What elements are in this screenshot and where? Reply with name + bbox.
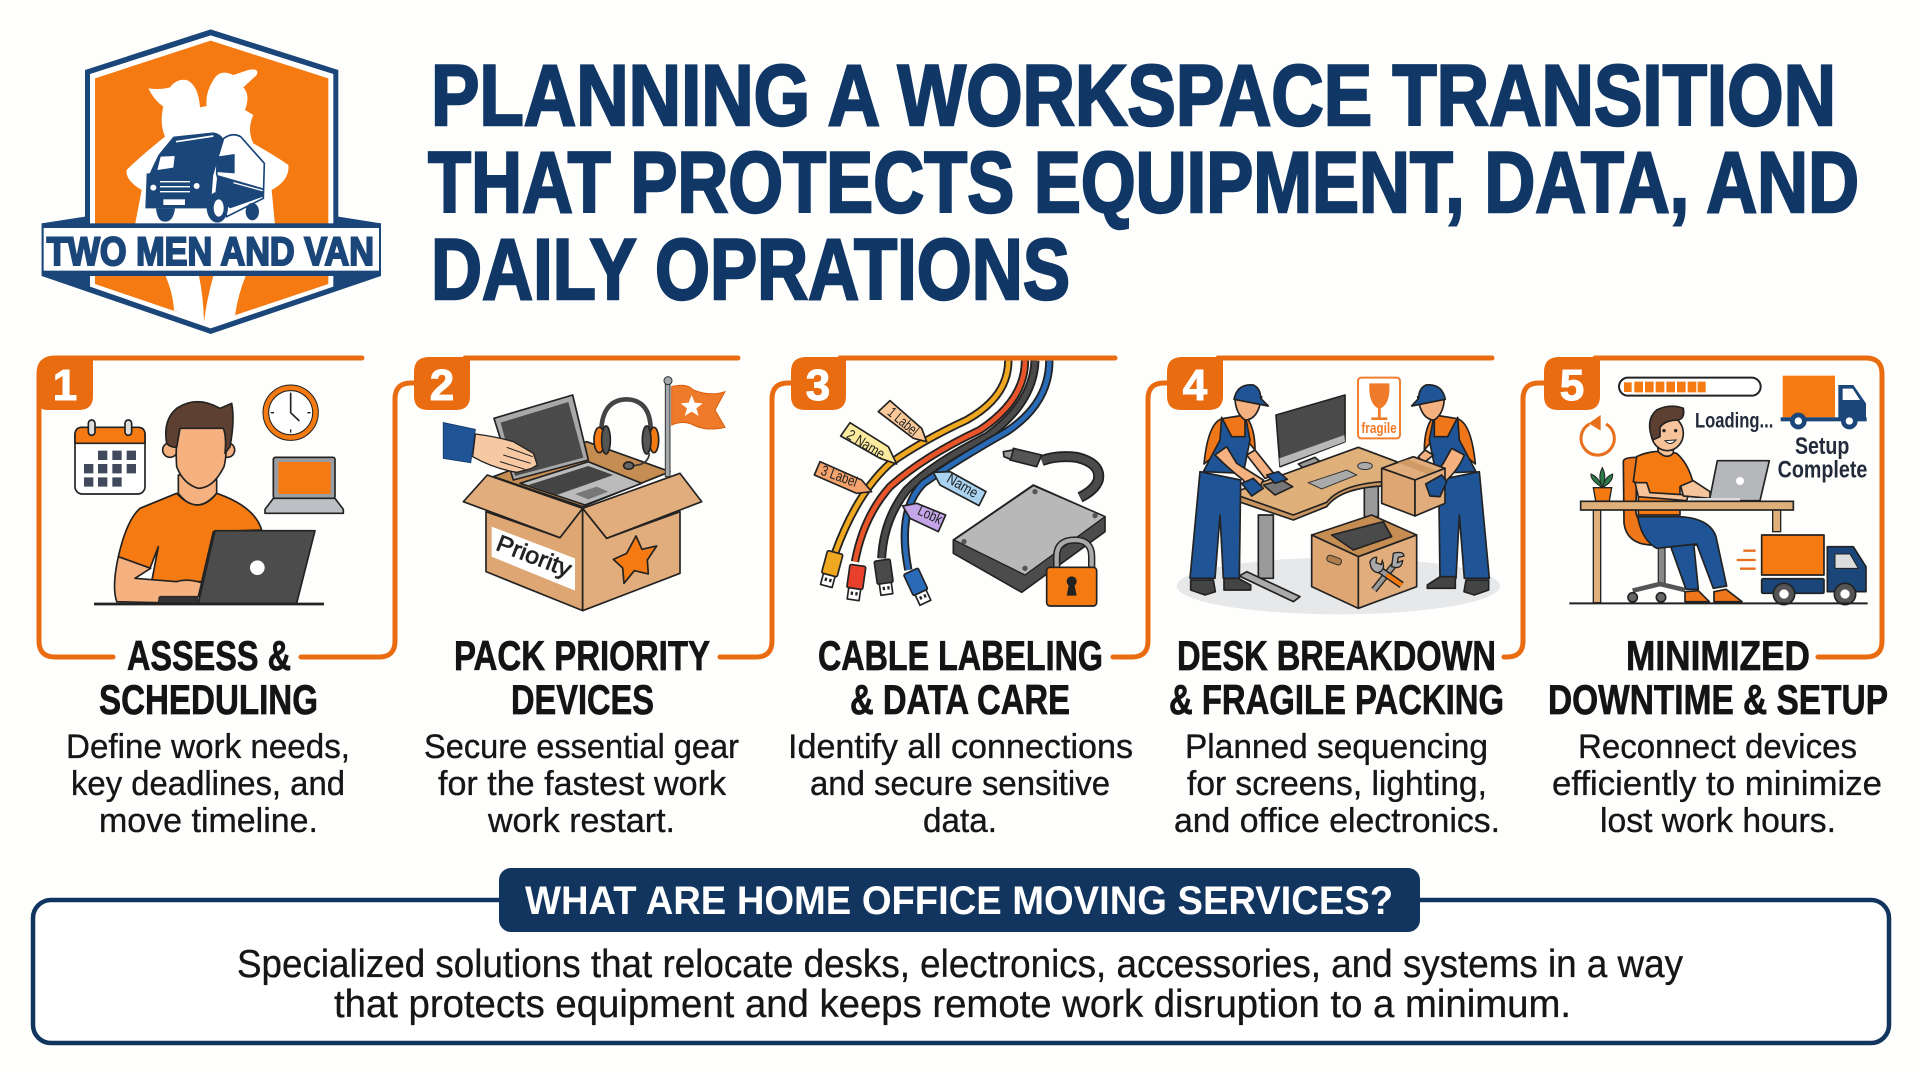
icon: hand bbox=[443, 423, 537, 472]
step 4 text: for screens, lighting, bbox=[1187, 765, 1487, 803]
icon: cardboard box: Priority bbox=[493, 530, 576, 582]
cable tags: 3 Label bbox=[819, 463, 859, 491]
laptop bbox=[1690, 461, 1769, 501]
desk bbox=[1232, 447, 1397, 520]
badge: step 2: 2 bbox=[430, 361, 454, 410]
step 4 text: & FRAGILE PACKING bbox=[1169, 676, 1504, 723]
icon: monitor bbox=[1276, 395, 1345, 475]
panel body text: that protects equipment and keeps remote work disruption to a minimum. bbox=[334, 983, 1571, 1026]
step 5 text: Reconnect devices bbox=[1578, 728, 1857, 766]
icon: packed box with tools bbox=[1312, 515, 1417, 608]
right mover bbox=[1412, 385, 1489, 595]
status labels: Setup bbox=[1795, 433, 1849, 460]
badge: step 3: 3 bbox=[806, 361, 830, 410]
illustration 4: two movers and desk breakdown bbox=[1177, 378, 1500, 614]
panel heading pill bbox=[499, 868, 1420, 932]
step 2 text: Secure essential gear bbox=[424, 728, 739, 766]
panel: what are home office moving services bbox=[33, 868, 1889, 1043]
title: DAILY OPRATIONS bbox=[431, 222, 1070, 318]
icon: headset bbox=[594, 399, 659, 469]
icon: refresh arrow bbox=[1581, 415, 1614, 455]
illustration 1: person planning at laptop bbox=[75, 385, 343, 604]
step 3 text: and secure sensitive bbox=[810, 765, 1110, 803]
badge: step 5 bbox=[1544, 357, 1600, 410]
step 4 text: DESK BREAKDOWN bbox=[1177, 632, 1496, 679]
step 5 text: lost work hours. bbox=[1600, 802, 1836, 840]
badge: step 1 bbox=[37, 357, 93, 410]
status labels: Loading... bbox=[1695, 408, 1773, 432]
step 3 text: Identify all connections bbox=[788, 728, 1133, 766]
step 3 text: CABLE LABELING bbox=[818, 632, 1103, 679]
step 3 text bbox=[788, 632, 1133, 840]
icon: padlock bbox=[1047, 540, 1097, 606]
chair bbox=[1623, 457, 1698, 602]
icon: external drive bbox=[953, 448, 1105, 592]
logo: Two Men and Van shield bbox=[42, 29, 381, 334]
person bbox=[1633, 406, 1742, 602]
cable tags bbox=[814, 401, 986, 532]
step 3 text: & DATA CARE bbox=[850, 676, 1070, 723]
badge: step 2 bbox=[414, 357, 470, 410]
panel body text: Specialized solutions that relocate desks, electronics, accessories, and systems in a way bbox=[237, 943, 1683, 986]
icon: laptop in box bbox=[494, 395, 642, 505]
logo: van bbox=[145, 132, 264, 223]
illustration 3: labeled cables and encrypted drive bbox=[814, 361, 1105, 606]
badge: step 3 bbox=[791, 357, 846, 410]
step 2 text: PACK PRIORITY bbox=[454, 632, 710, 679]
illustration 2: priority box bbox=[443, 377, 725, 611]
step 4 text: Planned sequencing bbox=[1185, 728, 1488, 766]
status labels: Complete bbox=[1778, 456, 1867, 483]
step 4 text: and office electronics. bbox=[1174, 802, 1500, 840]
step 5 text: MINIMIZED bbox=[1626, 632, 1810, 679]
laptop bbox=[158, 531, 315, 603]
cable tags: Lobk bbox=[915, 503, 945, 528]
step 2 text: work restart. bbox=[487, 802, 675, 840]
cables bbox=[835, 361, 1049, 570]
step 2 text bbox=[424, 632, 739, 840]
step 3 text: data. bbox=[923, 802, 997, 840]
usb plugs bbox=[819, 550, 933, 606]
logo: two men silhouette bbox=[127, 69, 288, 225]
table top bbox=[1581, 501, 1793, 510]
person bbox=[115, 402, 262, 603]
icon: plant bbox=[1591, 468, 1613, 501]
step 5 text: efficiently to minimize bbox=[1552, 765, 1882, 803]
step connectors: orange frame lines bbox=[39, 358, 1882, 657]
table legs bbox=[1593, 510, 1781, 603]
logo: name banner: TWO MEN AND VAN bbox=[47, 230, 374, 274]
illustration 5: worker at desk with setup complete bbox=[1569, 376, 1868, 605]
cable tags: 1 Label bbox=[884, 405, 921, 440]
icon: delivery truck top bbox=[1781, 376, 1867, 429]
icon: carried box bbox=[1382, 457, 1447, 516]
cable tags: 2 Name bbox=[844, 427, 887, 463]
panel heading pill: WHAT ARE HOME OFFICE MOVING SERVICES? bbox=[525, 879, 1393, 923]
step 2 text: DEVICES bbox=[511, 676, 654, 723]
icon: cardboard box bbox=[463, 473, 702, 611]
icon: flag bbox=[664, 377, 725, 477]
step 1 text: move timeline. bbox=[99, 802, 318, 840]
icon: fragile label bbox=[1358, 378, 1400, 438]
step 2 text: for the fastest work bbox=[438, 765, 727, 803]
icon: small laptop bbox=[265, 457, 343, 513]
step 1 text: ASSESS & bbox=[127, 632, 291, 679]
icon: delivery truck bottom bbox=[1737, 535, 1866, 605]
desk legs bbox=[1239, 483, 1378, 602]
logo: legs silhouette below banner bbox=[166, 276, 246, 325]
icon: calendar bbox=[75, 420, 145, 494]
cable tags: Name bbox=[944, 471, 981, 502]
progress bar bbox=[1619, 378, 1761, 396]
title bbox=[428, 48, 1859, 318]
panel body text bbox=[237, 943, 1683, 1026]
step 5 text bbox=[1548, 632, 1888, 840]
left mover bbox=[1190, 385, 1287, 595]
badge: step 1: 1 bbox=[53, 361, 77, 410]
step 4 text bbox=[1169, 632, 1504, 840]
step 1 text: Define work needs, bbox=[66, 728, 350, 766]
badge: step 4: 4 bbox=[1183, 361, 1208, 410]
step 1 text: SCHEDULING bbox=[99, 676, 318, 723]
step 1 text bbox=[66, 632, 350, 840]
icon: wall clock bbox=[263, 385, 318, 440]
badge: step 4 bbox=[1167, 357, 1223, 410]
step 1 text: key deadlines, and bbox=[71, 765, 345, 803]
badge: step 5: 5 bbox=[1560, 361, 1584, 410]
icon: fragile label: fragile bbox=[1361, 421, 1397, 437]
status labels bbox=[1695, 408, 1867, 483]
